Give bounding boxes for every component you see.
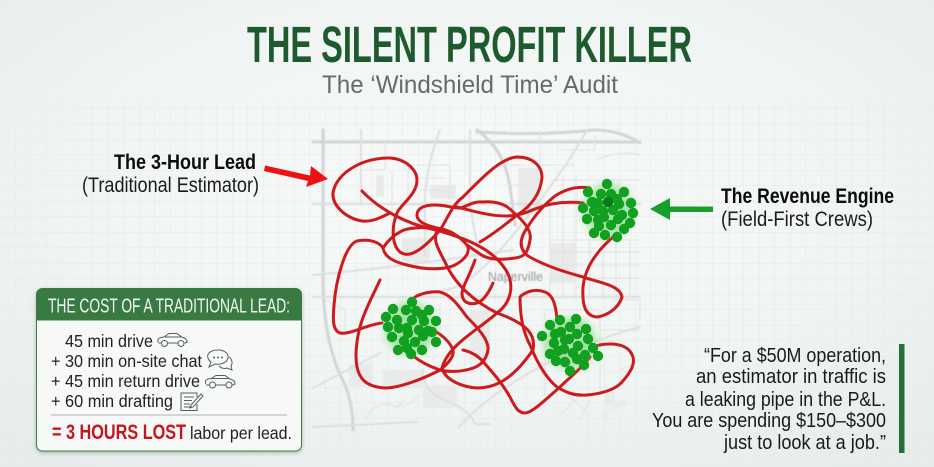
tangled red route of the traditional estimator	[333, 157, 633, 413]
quote: just to look at a job.”	[723, 431, 886, 454]
label: the revenue engine: (Field-First Crews)	[721, 208, 873, 231]
subtitle: The ‘Windshield Time’ Audit	[322, 71, 618, 99]
quote: a leaking pipe in the P&L.	[685, 388, 886, 411]
result: 3 hours lost: = 3 HOURS LOST	[52, 421, 186, 444]
quote: “For a $50M operation,	[704, 344, 886, 367]
line: 60 min drafting: + 60 min drafting	[51, 391, 173, 411]
arrow: red, pointing at the route	[264, 166, 328, 187]
panel: cost of a traditional lead	[36, 288, 302, 451]
map background	[313, 130, 640, 430]
line: 30 min on-site chat: + 30 min on-site chat	[51, 351, 202, 371]
quote accent bar	[899, 344, 904, 453]
label: the revenue engine: The Revenue Engine	[721, 185, 894, 208]
arrow: green, pointing at the cluster	[650, 198, 713, 220]
quote	[652, 344, 886, 454]
label: the 3-hour lead: (Traditional Estimator)	[82, 174, 259, 197]
label: the revenue engine	[721, 185, 894, 231]
icon: speech bubbles	[208, 350, 232, 370]
icon: car	[158, 334, 187, 346]
divider	[51, 414, 287, 416]
green cluster: south-west crew	[381, 297, 441, 359]
title: THE SILENT PROFIT KILLER	[247, 16, 692, 73]
result suffix: labor per lead.	[190, 423, 292, 443]
panel header	[36, 288, 302, 320]
panel header: THE COST OF A TRADITIONAL LEAD:	[48, 296, 290, 318]
quote: You are spending $150–$300	[652, 409, 886, 432]
green cluster: south-east crew	[537, 314, 603, 376]
label: the 3-hour lead: The 3-Hour Lead	[114, 151, 256, 174]
icon: document and pencil	[181, 393, 203, 410]
label: the 3-hour lead	[82, 151, 259, 197]
icon: car	[206, 376, 235, 388]
green cluster: north-east crew	[578, 179, 638, 242]
quote: an estimator in traffic is	[696, 365, 886, 388]
map label: Naperville: Naperville	[488, 270, 543, 284]
line: 45 min return drive: + 45 min return drive	[51, 371, 200, 391]
line: 45 min drive: 45 min drive	[65, 331, 153, 351]
